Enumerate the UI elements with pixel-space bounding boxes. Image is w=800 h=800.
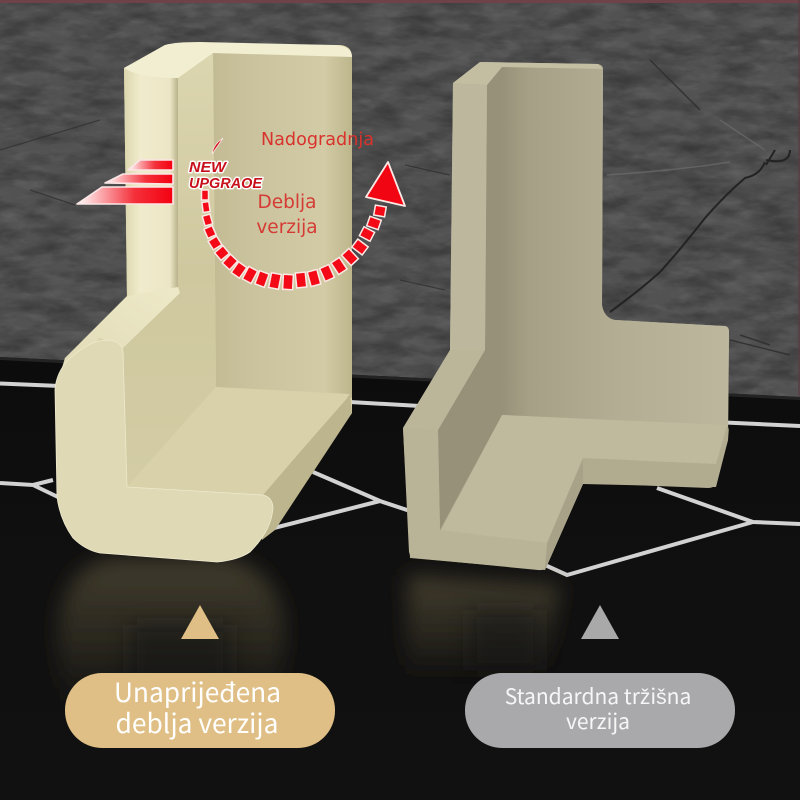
label: upgrade: Nadogradnja <box>261 129 374 150</box>
floor reflection: left product <box>58 558 285 710</box>
floor of the guard <box>440 415 727 543</box>
background: black floor <box>0 357 800 800</box>
label: thicker version: Deblja <box>258 192 316 213</box>
diagonal bevel <box>403 350 485 430</box>
badge: new upgrade <box>189 159 263 192</box>
floor of the guard <box>127 387 350 495</box>
label: thicker version: verzija <box>256 217 318 238</box>
inner side wall <box>123 53 216 487</box>
back wall <box>213 53 352 398</box>
top face <box>124 42 352 78</box>
back wall <box>502 64 729 427</box>
underside of the tray <box>262 395 352 540</box>
upgrade stripes graphic <box>77 160 173 204</box>
curved upgrade arrow <box>202 138 405 290</box>
diagonal bevel <box>62 287 180 370</box>
product: thick upgraded corner guard <box>55 42 352 562</box>
label: thicker version <box>256 192 318 238</box>
pill label: upgraded thicker version: deblja verzija <box>116 702 278 741</box>
pill label: standard market version <box>465 673 735 748</box>
front left face <box>403 428 547 570</box>
badge: new upgrade: NEW <box>189 159 228 176</box>
pill label: standard market version: verzija <box>566 706 630 736</box>
pill label: standard market version: Standardna tržišna <box>505 681 691 711</box>
tray front <box>583 427 729 488</box>
silhouette base <box>403 62 729 570</box>
rounded front face <box>55 340 273 562</box>
pill label: upgraded thicker version <box>65 671 335 748</box>
pill label: upgraded thicker version: Unaprijeđena <box>114 671 281 710</box>
top chamfer <box>453 62 502 85</box>
floor reflection: right product <box>405 575 560 680</box>
column front <box>450 83 487 350</box>
inner side wall <box>438 67 502 530</box>
badge: new upgrade: UPGRAOE <box>189 175 263 192</box>
marker triangle: upgraded <box>181 605 219 639</box>
marker triangle: standard <box>581 605 619 639</box>
column front <box>124 68 178 298</box>
silhouette base <box>55 45 352 562</box>
tray underside <box>545 458 583 570</box>
floor inlay lines <box>0 384 800 575</box>
product: standard market corner guard <box>403 62 729 570</box>
